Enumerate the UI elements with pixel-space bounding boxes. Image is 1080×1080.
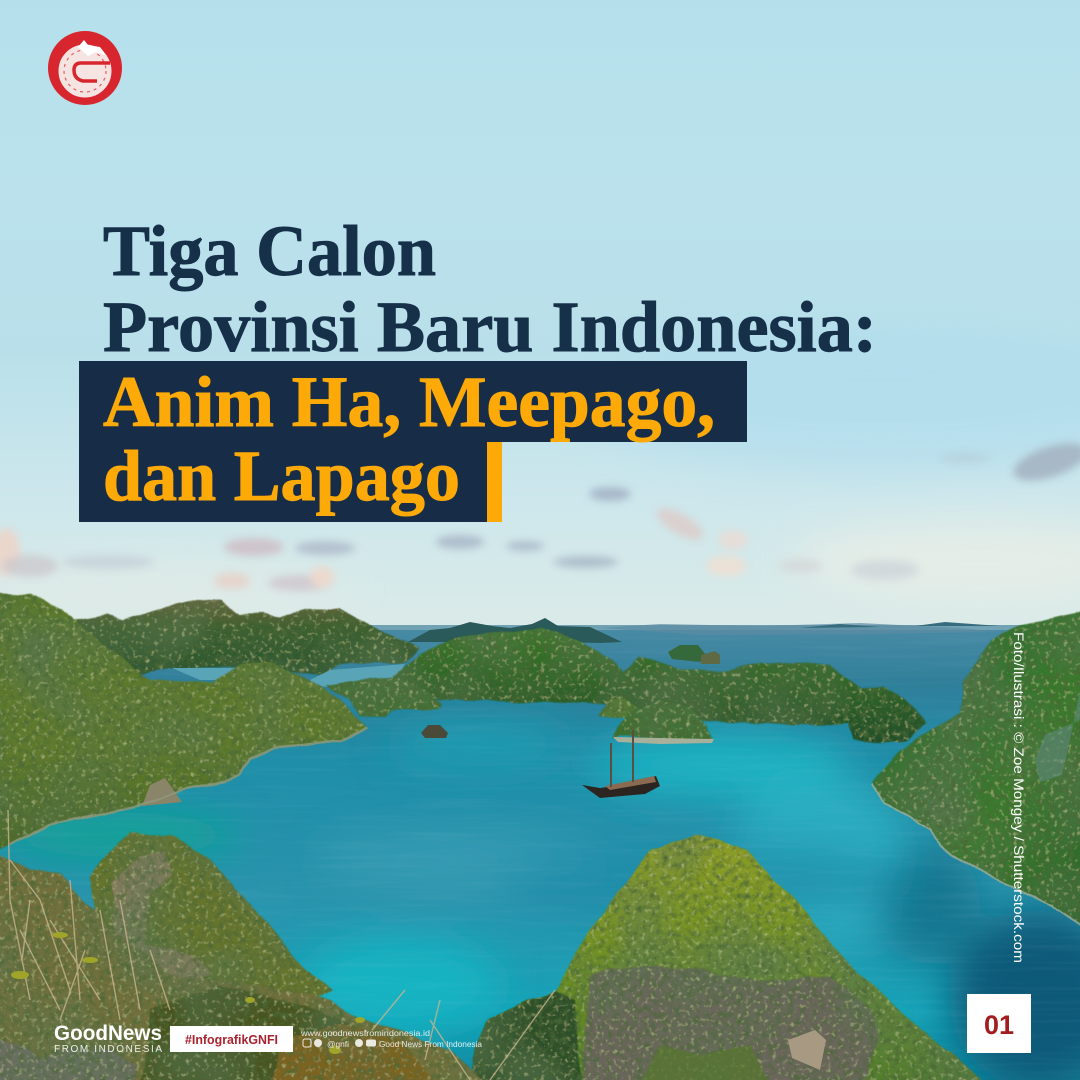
pale shoreline (873, 785, 1080, 930)
highlight panel: navy bars with orange headline (79, 361, 747, 522)
page number box (967, 994, 1031, 1053)
logo: red circular dragon-eagle emblem (48, 31, 122, 105)
strip of far bay water (172, 664, 405, 688)
footer website and social links: Good News From Indonesia (379, 1040, 483, 1049)
orange cursor bar (487, 442, 502, 522)
back hill island (60, 600, 418, 680)
sea with turquoise shallows (0, 625, 1080, 1080)
sky with clouds (0, 0, 1080, 640)
social icons (303, 1039, 376, 1047)
red G mark (74, 63, 110, 81)
footer brand: GoodNews From Indonesia: GoodNews (54, 1022, 162, 1045)
orange headline text (103, 362, 715, 516)
hashtag label: #InfografikGNFI (185, 1032, 278, 1047)
foreground left rocky island (90, 832, 332, 1030)
small islet near boat (598, 697, 714, 744)
orange headline text: Anim Ha, Meepago, (103, 362, 715, 442)
title: dark headline lines (103, 211, 877, 367)
central long island chain (388, 628, 926, 741)
large right hill (873, 610, 1080, 930)
title: dark headline lines: Provinsi Baru Indonesia: (103, 287, 877, 367)
orange headline text: dan Lapago (103, 436, 460, 516)
white serpent ring (63, 49, 107, 93)
footer brand: GoodNews From Indonesia (54, 1022, 162, 1055)
large left hill (0, 592, 368, 855)
hashtag label (170, 1026, 293, 1052)
rock in the bay (421, 725, 448, 738)
footer brand: GoodNews From Indonesia: FROM INDONESIA (54, 1044, 162, 1055)
wooden schooner boat (582, 730, 660, 798)
distant twin islets (668, 645, 720, 664)
pale shoreline (10, 728, 368, 845)
footer website and social links (300, 1029, 483, 1049)
footer website and social links: @gnfi (327, 1040, 349, 1049)
page number box: 01 (984, 1010, 1014, 1040)
photo credit rotated: Foto/Ilustrasi : © Zoe Mongey / Shutterstock.com (1011, 632, 1026, 963)
foreground shrubs and bare branches (0, 810, 555, 1080)
far islands on the horizon (408, 618, 1000, 643)
footer website and social links: www.goodnewsfromindonesia.id (300, 1029, 430, 1038)
foreground central rock island (470, 834, 990, 1080)
small island in the bay left (325, 678, 442, 718)
title: dark headline lines: Tiga Calon (103, 211, 436, 291)
